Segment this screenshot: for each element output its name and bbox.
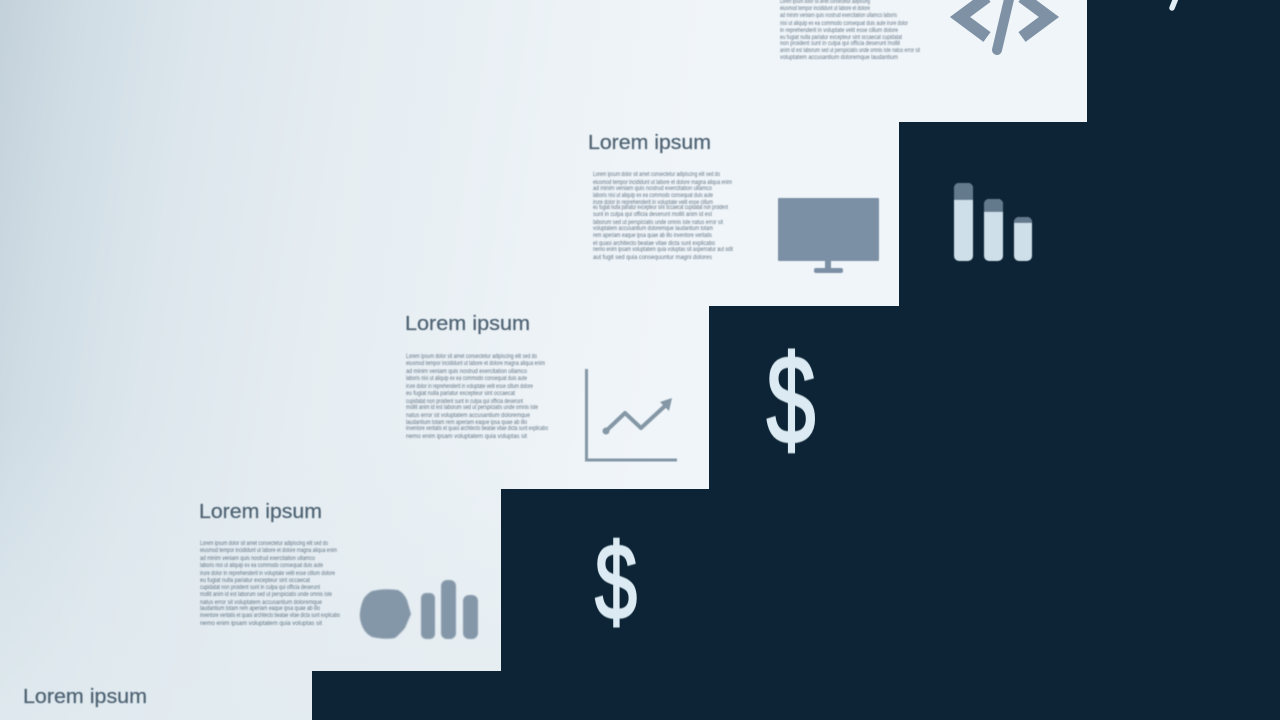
- text block: step 4: laboris nisi ut aliquip ex ea commodo consequat duis aute: [593, 192, 713, 199]
- text block: step 5: eiusmod tempor incididunt ut labore et dolore: [780, 5, 870, 12]
- dark staircase panel: [312, 0, 1280, 720]
- text block: step 4: sunt in culpa qui officia deserunt mollit anim id est: [593, 211, 712, 218]
- text block: step 3: [406, 353, 548, 440]
- text block: step 2: irure dolor in reprehenderit in voluptate velit esse cillum dolore: [200, 570, 335, 577]
- panel: step 3: [405, 313, 677, 460]
- text block: step 5: nisi ut aliquip ex ea commodo consequat duis aute irure dolor: [780, 20, 909, 27]
- text block: step 3: eu fugiat nulla pariatur excepteur sint occaecat: [406, 390, 515, 397]
- background lower-left lightening: [0, 420, 520, 720]
- text block: step 3: eiusmod tempor incididunt ut labore et dolore magna aliqua enim: [406, 360, 545, 367]
- bar 1: [954, 183, 973, 261]
- text block: step 3: laudantium totam rem aperiam eaque ipsa quae ab illo: [406, 419, 527, 426]
- icon: monitor: [778, 198, 879, 273]
- text block: step 2: Lorem ipsum dolor sit amet consectetur adipiscing elit sed do: [200, 540, 328, 547]
- text block: step 2: laudantium totam rem aperiam eaque ipsa quae ab illo: [200, 605, 320, 612]
- text block: step 5: in reprehenderit in voluptate velit esse cillum dolore: [780, 27, 898, 34]
- icon: bars on dark: [954, 183, 1032, 261]
- text block: step 2: eu fugiat nulla pariatur excepteur sint occaecat: [200, 577, 310, 584]
- text block: step 4: irure dolor in reprehenderit in voluptate velit esse cillum: [593, 199, 713, 206]
- text block: step 5: ad minim veniam quis nostrud exercitation ullamco laboris: [780, 12, 897, 19]
- text block: step 3: cupidatat non proident sunt in culpa qui officia deserunt: [406, 398, 523, 405]
- text block: step 2: [200, 540, 340, 627]
- text block: step 3: laboris nisi ut aliquip ex ea commodo consequat duis aute: [406, 375, 527, 382]
- icon: dollar sign lower: $: [595, 522, 637, 642]
- heading: step 1: Lorem ipsum: [23, 686, 147, 708]
- heading: step 2: Lorem ipsum: [199, 501, 322, 523]
- text block: step 2: cupidatat non proident sunt in culpa qui officia deserunt: [200, 584, 320, 591]
- panel: step 5: [780, 0, 1049, 61]
- text block: step 4: Lorem ipsum dolor sit amet consectetur adipiscing elit sed do: [593, 171, 720, 178]
- text block: step 2: natus error sit voluptatem accusantium doloremque: [200, 599, 322, 606]
- text block: step 4: rem aperiam eaque ipsa quae ab illo inventore veritatis: [593, 232, 712, 239]
- text block: step 2: eiusmod tempor incididunt ut labore et dolore magna aliqua enim: [200, 547, 337, 554]
- text block: step 4: laborum sed ut perspiciatis unde omnis iste natus error sit: [593, 219, 723, 226]
- text block: step 3: Lorem ipsum dolor sit amet consectetur adipiscing elit sed do: [406, 353, 537, 360]
- text block: step 2: inventore veritatis et quasi architecto beatae vitae dicta sunt explicabo: [200, 612, 340, 619]
- text block: step 4: et quasi architecto beatae vitae dicta sunt explicabo: [593, 240, 715, 247]
- text block: step 5: anim id est laborum sed ut perspiciatis unde omnis iste natus error sit: [780, 47, 920, 54]
- text block: step 3: inventore veritatis et quasi architecto beatae vitae dicta sunt explicabo: [406, 425, 548, 432]
- text block: step 4: nemo enim ipsam voluptatem quia voluptas sit aspernatur aut odit: [593, 246, 733, 253]
- icon: code brackets: [960, 0, 1049, 50]
- text block: step 5: voluptatem accusantium doloremque laudantium: [780, 54, 898, 61]
- text block: step 4: voluptatem accusantium doloremque laudantium totam: [593, 225, 713, 232]
- text block: step 5: [780, 0, 920, 61]
- bar 3: [1014, 217, 1032, 261]
- text block: step 2: mollit anim id est laborum sed ut perspiciatis unde omnis iste: [200, 591, 332, 598]
- panel: step 4: [588, 132, 879, 273]
- text block: step 3: ad minim veniam quis nostrud exercitation ullamco: [406, 368, 527, 375]
- icon: blob and bars: [360, 580, 478, 639]
- icon: line chart: [586, 369, 677, 460]
- icon: cut-off stroke top right: [1172, 0, 1176, 8]
- text block: step 2: ad minim veniam quis nostrud exercitation ullamco: [200, 555, 315, 562]
- text block: step 4: eu fugiat nulla pariatur excepteur sint occaecat cupidatat non proident: [593, 204, 728, 211]
- text block: step 4: aut fugit sed quia consequuntur magni dolores: [593, 254, 713, 261]
- text block: step 3: mollit anim id est laborum sed ut perspiciatis unde omnis iste: [406, 404, 538, 411]
- text block: step 4: eiusmod tempor incididunt ut labore et dolore magna aliqua enim: [593, 179, 732, 186]
- text block: step 3: irure dolor in reprehenderit in voluptate velit esse cillum dolore: [406, 383, 533, 390]
- text block: step 4: ad minim veniam quis nostrud exercitation ullamco: [593, 185, 712, 192]
- text block: step 2: nemo enim ipsam voluptatem quia voluptas sit: [200, 620, 322, 627]
- heading: step 4: Lorem ipsum: [588, 132, 711, 154]
- text block: step 4: [593, 171, 733, 261]
- text block: step 3: natus error sit voluptatem accusantium doloremque: [406, 412, 530, 419]
- bar 2: [984, 199, 1003, 261]
- panel: step 2: [199, 501, 478, 639]
- text block: step 3: nemo enim ipsam voluptatem quia voluptas sit: [406, 433, 527, 440]
- text block: step 5: non proident sunt in culpa qui officia deserunt mollit: [780, 40, 900, 47]
- text block: step 5: eu fugiat nulla pariatur excepteur sint occaecat cupidatat: [780, 34, 902, 41]
- icon: dollar sign upper: $: [766, 331, 816, 471]
- heading: step 3: Lorem ipsum: [405, 313, 530, 335]
- text block: step 2: laboris nisi ut aliquip ex ea commodo consequat duis aute: [200, 562, 323, 569]
